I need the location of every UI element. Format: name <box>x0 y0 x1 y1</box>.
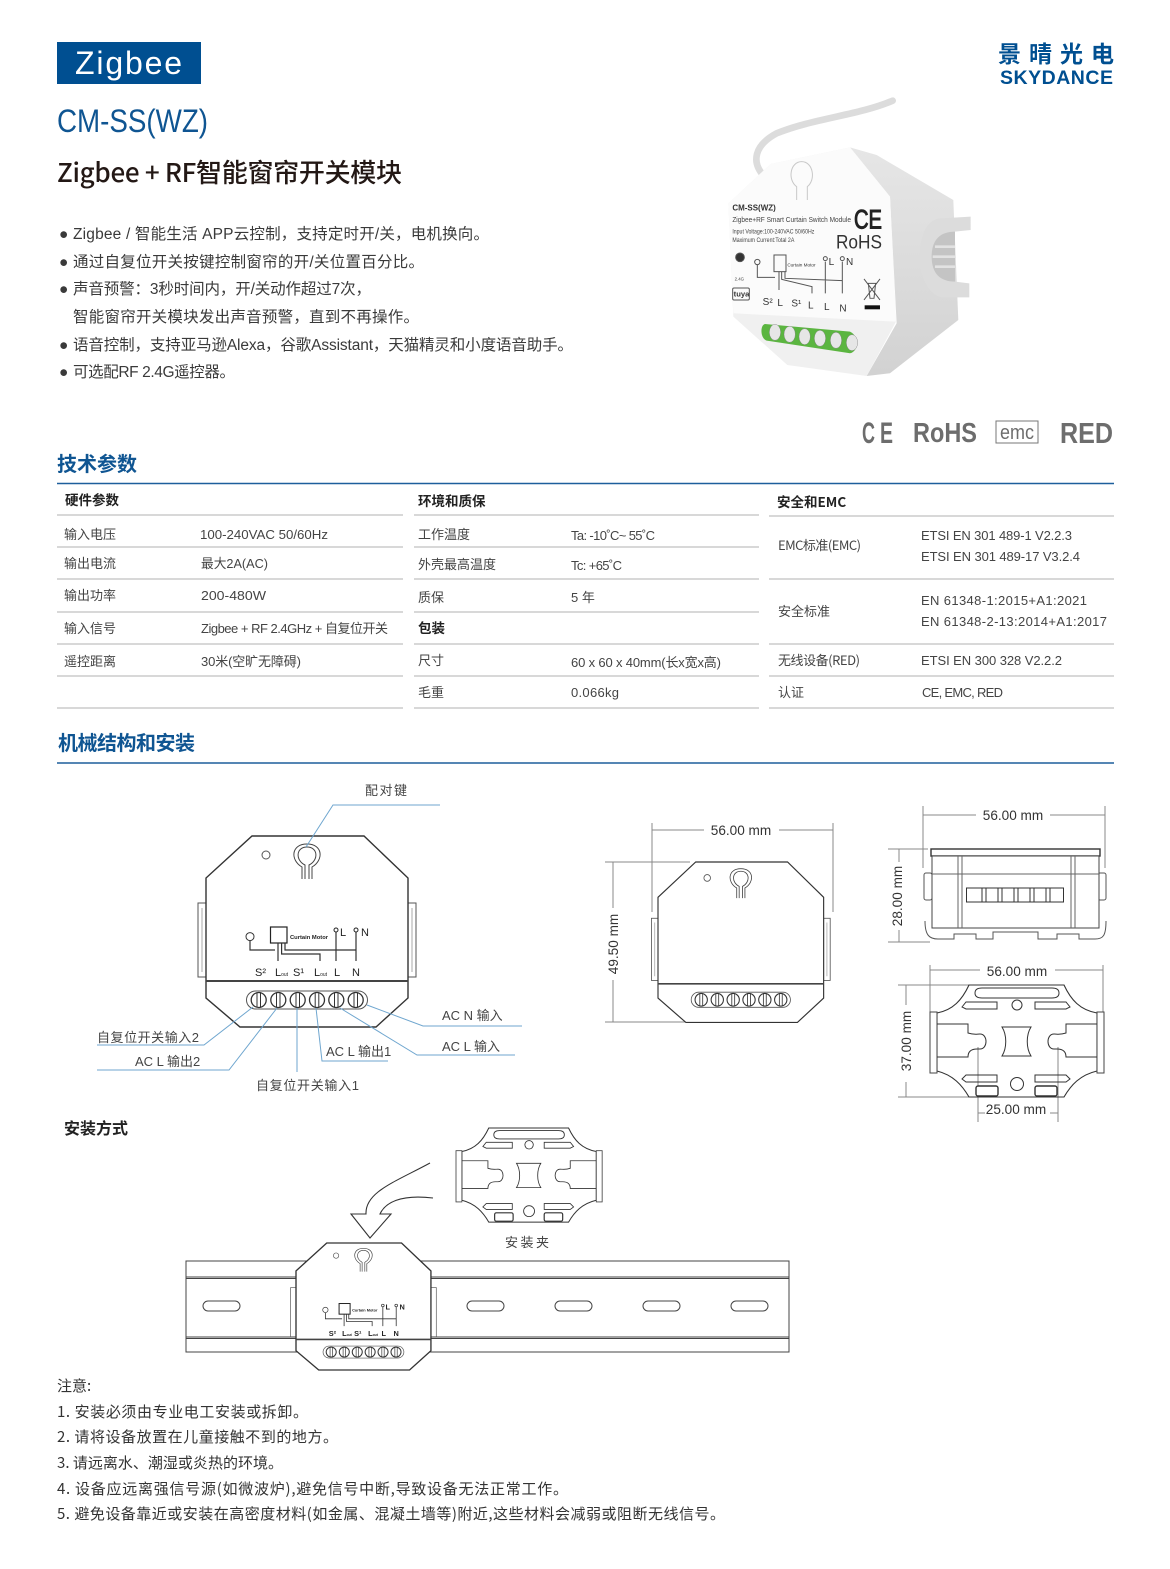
height label: 49.50 mm <box>606 914 621 974</box>
label text on housing: L <box>777 298 783 309</box>
label text on housing: L <box>824 302 830 313</box>
label text on housing: Input Voltage:100-240VAC 50/60Hz <box>732 230 814 236</box>
label text on housing: tuya <box>734 290 750 299</box>
callout: pairing key: 配对键 <box>365 783 407 798</box>
table: environment, warranty, packaging: 60 x 60 x 40mm(长x宽x高) <box>571 655 721 670</box>
table: environment, warranty, packaging: 质保 <box>418 590 444 605</box>
diagram: module mounted on rail: Curtain Motor <box>352 1309 378 1312</box>
brand logo <box>998 41 1114 89</box>
table: environment, warranty, packaging: 工作温度 <box>418 527 470 542</box>
label text on housing: S¹ <box>791 299 802 310</box>
table: hardware parameters: 100-240VAC 50/60Hz <box>200 527 328 542</box>
wiring schematic: Lout <box>314 967 328 979</box>
housing side <box>850 147 958 376</box>
table: environment, warranty, packaging: 5 年 <box>571 590 595 605</box>
wiring schematic: Lout <box>275 967 289 979</box>
diagram: DIN rail <box>186 1261 789 1352</box>
diagram: mounting clip dimensions <box>898 964 1104 1122</box>
diagram: module mounted on rail <box>291 1243 436 1370</box>
diagram: module mounted on rail: L <box>382 1329 387 1338</box>
label text on housing: L <box>829 257 835 268</box>
table: environment, warranty, packaging: Tc: +65˚C <box>571 558 622 573</box>
table: hardware parameters: 30米(空旷无障碍) <box>201 654 301 669</box>
wiring schematic: L <box>340 927 346 939</box>
wiring schematic <box>246 927 369 979</box>
certification marks: RED <box>1060 418 1113 450</box>
table: safety and EMC: 安全标准 <box>778 601 830 620</box>
diagram: installation clip <box>456 1128 602 1222</box>
badge: Zigbee <box>57 42 201 84</box>
table: hardware parameters <box>64 489 388 669</box>
diagram: module front with wiring <box>198 836 416 1027</box>
feature list <box>59 225 573 381</box>
feature list: ● <box>59 337 68 354</box>
feature list: 智能窗帘开关模块发出声音预警，直到不再操作。 <box>73 308 419 326</box>
wiring schematic: L <box>334 967 340 979</box>
product photo <box>728 101 971 376</box>
dimension lines <box>888 806 1105 942</box>
notes: 1. 安装必须由专业电工安装或拆卸。 <box>57 1401 308 1422</box>
diagram: module mounted on rail: N <box>394 1329 399 1338</box>
callout: AC L input <box>340 1008 515 1055</box>
table: safety and EMC: EN 61348-1:2015+A1:2021 <box>921 593 1087 608</box>
spacing label: 25.00 mm <box>986 1102 1046 1117</box>
table: hardware parameters: 硬件参数 <box>65 489 119 509</box>
screw terminals <box>246 991 368 1009</box>
heading: installation method: 安装方式 <box>64 1119 128 1138</box>
label text on housing <box>732 204 882 315</box>
certification marks <box>862 417 1113 450</box>
side view body <box>924 849 1106 939</box>
diagram: side view dimensions <box>888 806 1106 942</box>
table: hardware parameters: Zigbee + RF 2.4GHz + 自复位开关 <box>201 621 388 636</box>
badge: Zigbee: Zigbee <box>75 45 182 81</box>
brand logo: 景晴光电 <box>998 41 1114 67</box>
housing front <box>728 147 896 376</box>
wiring schematic: Curtain Motor <box>290 935 329 941</box>
certification marks: E <box>880 417 893 450</box>
diagram: module front dimensions <box>605 823 833 1022</box>
label text on housing: Zigbee+RF Smart Curtain Switch Module <box>732 215 851 224</box>
dimension lines <box>605 823 833 1022</box>
notes: 4. 设备应远离强信号源(如微波炉),避免信号中断,导致设备无法正常工作。 <box>57 1478 568 1499</box>
feature list: ● <box>59 254 68 271</box>
callout: AC L output 2 <box>97 1008 277 1070</box>
diagram: module mounted on rail: S¹ <box>354 1329 362 1338</box>
notes: 3. 请远离水、潮湿或炎热的环境。 <box>57 1452 283 1473</box>
table: hardware parameters: 输出功率 <box>64 588 116 603</box>
feature list: 可选配RF 2.4G遥控器。 <box>73 363 235 381</box>
table: safety and EMC: 认证 <box>778 682 804 701</box>
table: environment, warranty, packaging: 毛重 <box>418 685 444 700</box>
diagram: module mounted on rail: Lout <box>368 1329 379 1338</box>
table: hardware parameters: 遥控距离 <box>64 654 116 669</box>
wiring schematic: N <box>352 967 360 979</box>
diagram: module mounted on rail: L <box>386 1303 391 1311</box>
dimension lines <box>898 965 1103 1122</box>
table: safety and EMC: ETSI EN 301 489-17 V3.2.4 <box>921 549 1080 564</box>
module housing <box>198 836 416 1027</box>
callout: AC N input <box>367 1005 522 1026</box>
callout: AC L output 1: AC L 输出1 <box>326 1044 391 1059</box>
table: safety and EMC: EN 61348-2-13:2014+A1:2017 <box>921 614 1107 629</box>
callout: self-reset switch input 1 <box>256 1008 359 1093</box>
label text on housing: RoHS <box>836 233 882 254</box>
brand logo: SKYDANCE <box>1000 67 1113 89</box>
table: hardware parameters: 输出电流 <box>64 556 116 571</box>
table: environment, warranty, packaging: 包装 <box>418 617 445 637</box>
heading: technical parameters: 技术参数 <box>57 452 137 476</box>
callout: self-reset switch input 2: 自复位开关输入2 <box>97 1030 199 1045</box>
table: environment, warranty, packaging: Ta: -10˚C~ 55˚C <box>571 528 655 543</box>
blank module <box>651 862 830 1022</box>
height label: 37.00 mm <box>899 1011 914 1071</box>
diagram: module mounted on rail: Lout <box>342 1329 353 1338</box>
notes: 5. 避免设备靠近或安装在高密度材料(如金属、混凝土墙等)附近,这些材料会减弱或阻断无线信号。 <box>57 1503 725 1524</box>
feature list: ● <box>59 364 68 381</box>
feature list: ● <box>59 226 68 243</box>
label text on housing: CE <box>854 204 882 234</box>
callout: pairing key <box>306 783 440 847</box>
table: environment, warranty, packaging: 环境和质保 <box>418 490 486 510</box>
table: safety and EMC: 无线设备(RED) <box>778 650 860 669</box>
table: hardware parameters: 输入电压 <box>64 527 116 542</box>
certification marks: emc <box>1000 422 1034 444</box>
callout: self-reset switch input 1: 自复位开关输入1 <box>256 1078 359 1093</box>
certification marks: C <box>862 417 875 450</box>
callout: AC N input: AC N 输入 <box>442 1008 503 1023</box>
label text on housing: Curtain Motor <box>787 263 816 268</box>
wiring schematic: S² <box>255 967 266 979</box>
table: hardware parameters: 200-480W <box>201 588 267 603</box>
table: safety and EMC <box>777 491 1107 701</box>
product title: Zigbee + RF智能窗帘开关模块 <box>57 153 402 190</box>
diagram: module mounted on rail: N <box>400 1303 405 1311</box>
arrow: clip onto rail module <box>351 1163 433 1238</box>
wiring schematic: N <box>361 927 369 939</box>
table: safety and EMC: 安全和EMC <box>777 491 846 511</box>
width label: 56.00 mm <box>983 808 1043 823</box>
width label: 56.00 mm <box>987 964 1047 979</box>
callout: AC L output 1 <box>316 1008 391 1061</box>
label text on housing: N <box>839 304 847 315</box>
label text on housing: S² <box>763 297 773 308</box>
height label: 28.00 mm <box>890 866 905 926</box>
table: safety and EMC: ETSI EN 301 489-1 V2.2.3 <box>921 528 1072 543</box>
clip plate <box>930 985 1104 1097</box>
label wiring and symbols <box>733 253 880 309</box>
label: clip: 安装夹 <box>505 1235 549 1250</box>
table: safety and EMC: CE, EMC, RED <box>922 685 1003 700</box>
model number: CM-SS(WZ) <box>57 103 208 139</box>
table: environment, warranty, packaging <box>418 490 721 700</box>
table: safety and EMC: ETSI EN 300 328 V2.2.2 <box>921 653 1062 668</box>
antenna wire <box>756 101 893 177</box>
table: environment, warranty, packaging: 0.066kg <box>571 685 619 700</box>
callout: AC L output 2: AC L 输出2 <box>135 1054 200 1069</box>
table: hardware parameters: 最大2A(AC) <box>201 556 268 571</box>
certification marks: RoHS <box>913 417 977 448</box>
table: environment, warranty, packaging: 尺寸 <box>418 653 444 668</box>
feature list: ● <box>59 281 68 298</box>
wiring schematic: S¹ <box>293 967 304 979</box>
label text on housing: 2.4G <box>735 277 745 282</box>
callout: self-reset switch input 2 <box>97 1007 253 1045</box>
feature list: 通过自复位开关按键控制窗帘的开/关位置百分比。 <box>73 253 424 271</box>
label text on housing: Maximum Current:Total 2A <box>732 238 794 244</box>
feature list: Zigbee / 智能生活 APP云控制，支持定时开/关，电机换向。 <box>73 225 489 243</box>
diagram: module mounted on rail: S² <box>329 1329 337 1338</box>
feature list: 语音控制，支持亚马逊Alexa，谷歌Assistant，天猫精灵和小度语音助手。 <box>73 336 573 354</box>
label text on housing: CM-SS(WZ) <box>732 204 776 213</box>
label text on housing: L <box>808 300 814 311</box>
table: hardware parameters: 输入信号 <box>64 621 116 636</box>
table: safety and EMC: EMC标准(EMC) <box>778 535 861 554</box>
notes: 注意: <box>57 1375 91 1396</box>
notes <box>57 1375 725 1524</box>
table: environment, warranty, packaging: 外壳最高温度 <box>418 557 496 572</box>
heading: mechanical structure and installation: 机械结构和安装 <box>58 732 195 755</box>
callout: AC L input: AC L 输入 <box>442 1039 500 1054</box>
terminal block <box>761 324 858 353</box>
pairing key <box>791 162 812 200</box>
feature list: 声音预警：3秒时间内，开/关动作超过7次， <box>73 280 371 298</box>
label text on housing: N <box>846 257 853 268</box>
width label: 56.00 mm <box>711 823 771 838</box>
notes: 2. 请将设备放置在儿童接触不到的地方。 <box>57 1426 338 1447</box>
